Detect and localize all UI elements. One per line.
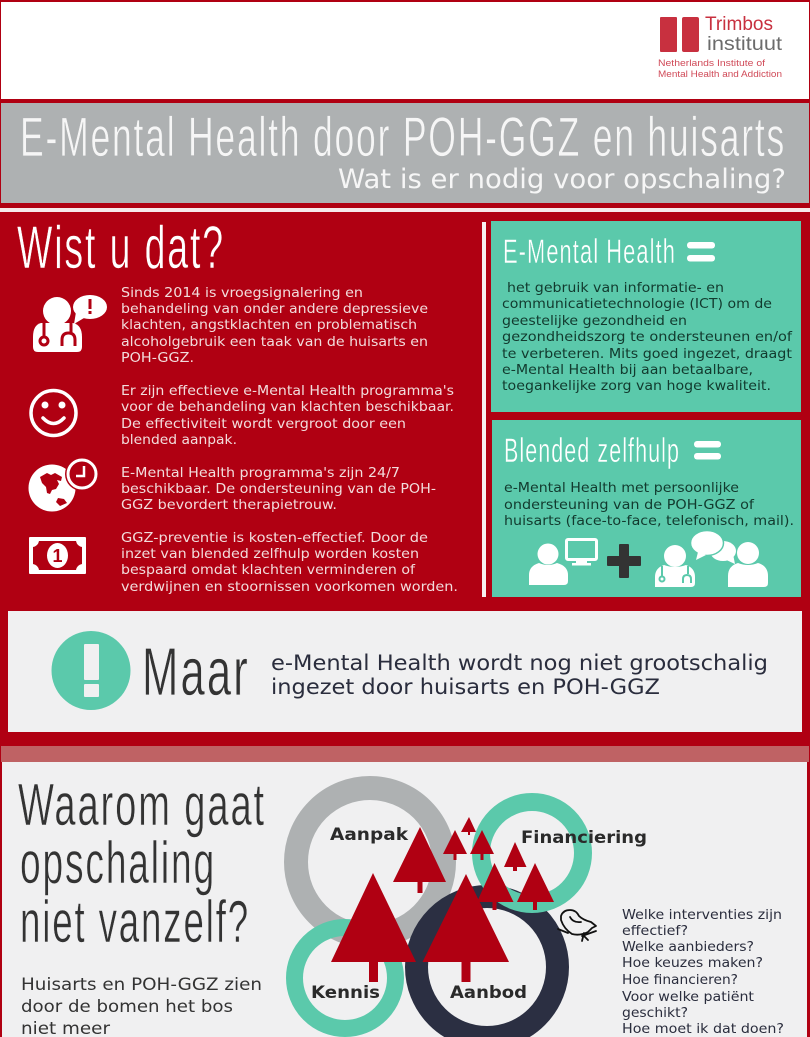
text: kosten-effectief	[121, 530, 458, 595]
text: bomen en bos: door de bomen het bos	[21, 997, 233, 1016]
logo: Trimbos instituut: Netherlands Institute of	[658, 58, 765, 69]
text: questions: Voor welke patiënt	[622, 989, 754, 1005]
text: callout message: e-Mental Health wordt nog niet grootschalig	[271, 651, 768, 675]
text: 24/7 beschikbaar: GGZ bevordert therapietrouw.	[121, 497, 337, 513]
text: taak huisarts: Sinds 2014 is vroegsignalering en	[121, 285, 363, 301]
panel: waarom gaat opschaling niet vanzelf	[2, 762, 807, 1037]
text: effectieve programma's	[121, 383, 454, 448]
panel: blended zelfhulp definition	[492, 420, 801, 597]
text: taak huisarts	[121, 285, 428, 366]
icon: bird	[558, 910, 596, 941]
text: taak huisarts: POH-GGZ.	[121, 350, 194, 366]
text: callout message	[271, 651, 768, 699]
heading: blended zelfhulp: Blended zelfhulp	[504, 432, 680, 470]
circle labels: Aanbod	[450, 983, 527, 1003]
text: taak huisarts: behandeling van onder andere depressieve	[121, 301, 428, 317]
heading: waarom: Waarom gaat	[18, 772, 266, 838]
text: questions: effectief?	[622, 923, 688, 939]
icon: exclamation circle	[52, 631, 130, 710]
text: kosten-effectief: GGZ-preventie is kosten-effectief. Door de	[121, 530, 428, 546]
circle labels	[311, 825, 647, 1003]
icon: smiley	[31, 390, 76, 436]
heading: waarom: niet vanzelf?	[20, 889, 250, 955]
trees	[331, 817, 554, 982]
icon: person with monitor	[529, 540, 596, 585]
text: effectieve programma's: voor de behandeling van klachten beschikbaar.	[121, 399, 454, 415]
diagram: circles and trees	[294, 788, 647, 1037]
icon: equals sign	[694, 441, 721, 460]
text: effectieve programma's: De effectiviteit wordt vergroot door een	[121, 416, 406, 432]
title band	[1, 103, 809, 203]
text: definition: e-Mental Health bij aan betaalbare,	[502, 362, 753, 378]
text: definition: het gebruik van informatie- en	[507, 280, 724, 296]
text: 24/7 beschikbaar: beschikbaar. De ondersteuning van de POH-	[121, 481, 436, 497]
text: kosten-effectief: inzet van blended zelfhulp worden kosten	[121, 546, 419, 562]
logo: Trimbos instituut: Mental Health and Addiction	[658, 69, 782, 80]
icon: globe and clock	[28, 457, 99, 512]
subtitle: Wat is er nodig voor opschaling?	[338, 164, 786, 195]
panel: e-mental health definition	[491, 221, 801, 412]
icon: doctor, speech bubbles and patient	[655, 530, 768, 587]
text: blended definition: ondersteuning van de POH-GGZ of	[504, 497, 755, 513]
circle: kennis	[294, 928, 396, 1028]
text: taak huisarts: alcoholgebruik een taak van de huisarts en	[121, 334, 428, 350]
logo: Trimbos instituut: Trimbos	[705, 14, 773, 35]
text: kosten-effectief: verdwijnen en stoornissen voorkomen worden.	[121, 579, 458, 595]
text: questions: Hoe moet ik dat doen?	[622, 1021, 784, 1037]
circle labels: Kennis	[311, 983, 380, 1003]
heading: wist u dat: Wist u dat?	[17, 214, 225, 281]
text: effectieve programma's: blended aanpak.	[121, 432, 237, 448]
text: definition: geestelijke gezondheid en	[502, 313, 687, 329]
text: definition	[502, 280, 793, 394]
text: questions: Welke interventies zijn	[622, 907, 782, 923]
text: questions: Hoe keuzes maken?	[622, 955, 763, 971]
text: questions: geschikt?	[622, 1005, 688, 1021]
text: blended definition	[504, 480, 794, 529]
text: taak huisarts: klachten, angstklachten en problematisch	[121, 317, 417, 333]
icon: banknote	[29, 537, 86, 574]
text: bomen en bos: Huisarts en POH-GGZ zien	[21, 975, 262, 994]
circle: financiering	[481, 802, 583, 904]
heading: maar: Maar	[142, 634, 250, 710]
logo: Trimbos instituut: instituut	[707, 34, 783, 55]
text: 24/7 beschikbaar: E-Mental Health programma's zijn 24/7	[121, 465, 400, 481]
text: questions: Hoe financieren?	[622, 972, 738, 988]
text: questions	[622, 907, 784, 1037]
icon: plus	[607, 544, 641, 578]
icon: banknote: 1	[52, 546, 63, 566]
text: definition: gezondheidszorg te ondersteunen en/of	[502, 329, 793, 345]
heading: waarom	[18, 772, 266, 955]
text: 24/7 beschikbaar	[121, 465, 436, 513]
heading: e-mental health: E-Mental Health	[503, 233, 676, 271]
text: bomen en bos	[21, 975, 262, 1037]
circle: aanbod	[416, 896, 558, 1037]
text: definition: toegankelijke zorg van hoge kwaliteit.	[502, 378, 771, 394]
heading: waarom: opschaling	[20, 830, 216, 896]
text: callout message: ingezet door huisarts en POH-GGZ	[271, 675, 660, 699]
icon: doctor with speech bubble	[33, 295, 107, 352]
text: definition: te verbeteren. Mits goed ingezet, draagt	[502, 346, 792, 362]
icon: equals sign	[687, 242, 715, 262]
logo: Trimbos instituut	[658, 14, 783, 80]
circle labels: Aanpak	[330, 825, 409, 845]
panel: wist u dat	[17, 214, 458, 595]
circle: aanpak	[296, 788, 444, 936]
text: kosten-effectief: bespaard omdat klachten verminderen of	[121, 562, 416, 578]
header with logo	[1, 2, 809, 99]
circle labels: Financiering	[521, 828, 647, 848]
text: effectieve programma's: Er zijn effectieve e-Mental Health programma's	[121, 383, 454, 399]
text: blended definition: e-Mental Health met persoonlijke	[504, 480, 739, 496]
text: questions: Welke aanbieders?	[622, 939, 754, 955]
text: blended definition: huisarts (face-to-face, telefonisch, mail).	[504, 513, 794, 529]
text: definition: communicatietechnologie (ICT) om de	[502, 296, 772, 312]
panel: maar callout	[8, 611, 802, 732]
